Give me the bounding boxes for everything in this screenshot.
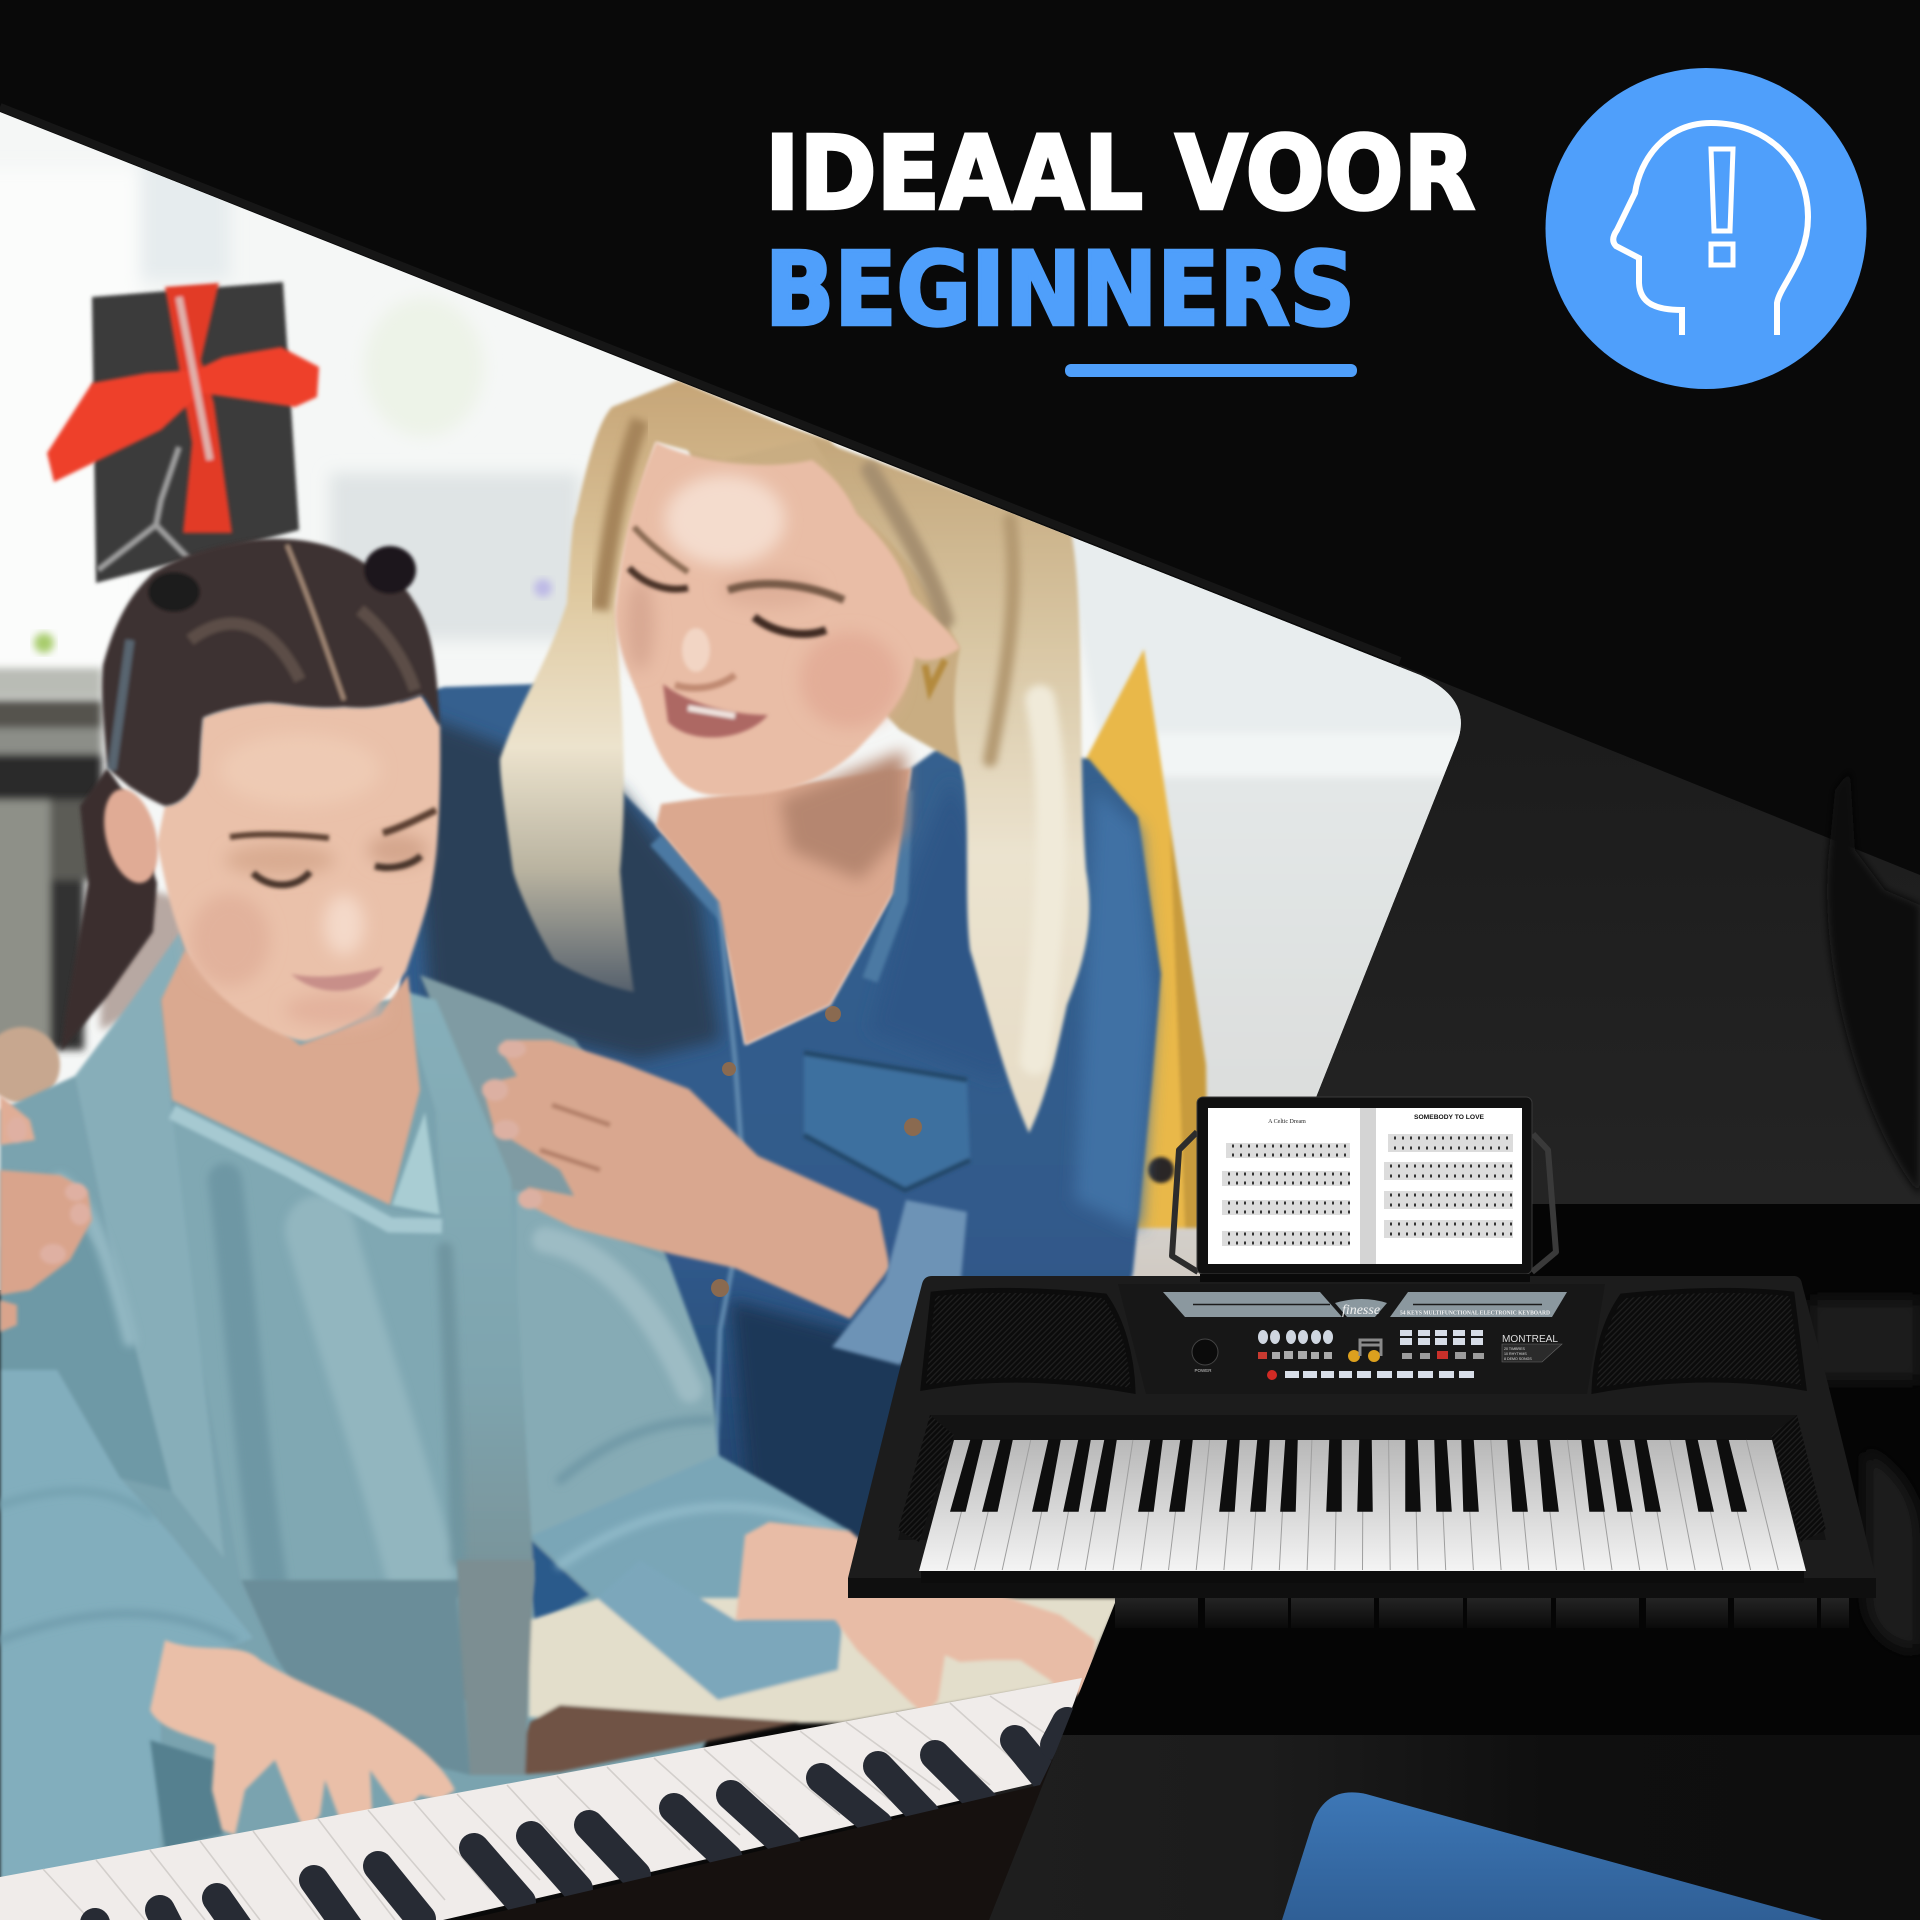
right collar band bbox=[400, 990, 534, 1700]
cardigan folds bbox=[0, 1180, 830, 1640]
music stand arms bbox=[1172, 1132, 1556, 1272]
feature box: 10 RHYTHMS bbox=[1504, 1352, 1527, 1356]
label dark lines bbox=[1193, 1304, 1542, 1306]
red percussion button bbox=[1267, 1370, 1277, 1380]
red ribbon bbox=[47, 283, 319, 570]
girl neck bbox=[161, 950, 420, 1205]
teacher left hair bbox=[500, 380, 812, 992]
title: ideaal voor: IDEAAL VOOR bbox=[765, 114, 1475, 234]
note symbol bbox=[1360, 1340, 1381, 1356]
girl face bbox=[157, 695, 440, 1041]
hair underlay bbox=[687, 420, 963, 768]
t-shirt inner piece bbox=[392, 1112, 440, 1215]
keyboard product bbox=[848, 1097, 1876, 1628]
denim pocket bbox=[804, 1053, 970, 1190]
top right buttons bbox=[1400, 1330, 1483, 1345]
song title left: A Celtic Dream bbox=[1268, 1119, 1306, 1125]
song title right: SOMEBODY TO LOVE bbox=[1414, 1114, 1485, 1121]
left speaker bbox=[923, 1290, 1133, 1391]
piano dividers bbox=[43, 1696, 1055, 1920]
girl ear bbox=[95, 783, 167, 889]
power label: POWER bbox=[1194, 1368, 1212, 1373]
denim cuff bbox=[832, 1200, 967, 1365]
exclamation mark bbox=[1711, 149, 1733, 265]
chin shadow bbox=[780, 750, 905, 880]
key slip bbox=[921, 1571, 1804, 1583]
keyboard lower strip bbox=[848, 1578, 1876, 1598]
keyboard feet bbox=[1115, 1598, 1849, 1628]
keyboard model caption: 54 KEYS MULTIFUNCTIONAL ELECTRONIC KEYBOARD bbox=[1400, 1310, 1550, 1316]
piano dark front bbox=[443, 1735, 1064, 1920]
shirt buttons bbox=[711, 1006, 922, 1297]
tablet frame bbox=[1197, 1097, 1532, 1274]
dark peg bbox=[1148, 1157, 1174, 1183]
tablet bbox=[1197, 1097, 1532, 1282]
power knob bbox=[1192, 1339, 1218, 1365]
girl hair bbox=[102, 539, 440, 806]
right key grill bbox=[1771, 1415, 1826, 1542]
denim collars bbox=[656, 790, 905, 980]
feature box: 20 TIMBRES bbox=[1504, 1347, 1526, 1351]
green ball bbox=[34, 633, 54, 653]
function buttons bbox=[1402, 1351, 1484, 1359]
girl cardigan bbox=[0, 932, 850, 1880]
keyboard control panel surround bbox=[1118, 1284, 1605, 1394]
teacher hand on shoulder bbox=[482, 1040, 890, 1319]
feature box bbox=[1502, 1344, 1562, 1362]
teacher denim shirt bbox=[400, 684, 1161, 1640]
girl face shading bbox=[190, 734, 428, 1026]
teacher right hair bbox=[812, 438, 1089, 1133]
mode buttons bbox=[1258, 1351, 1332, 1359]
white key dividers bbox=[947, 1440, 1778, 1570]
teacher facial features bbox=[629, 527, 945, 737]
girl left hand bbox=[150, 1640, 455, 1835]
photo background room bbox=[0, 90, 1480, 1300]
right sleeve denim peek bbox=[528, 1540, 590, 1625]
right hair shading bbox=[870, 470, 1051, 1060]
left collar band bbox=[75, 932, 224, 1558]
black gift box bbox=[92, 282, 299, 583]
white keys bbox=[919, 1440, 1806, 1571]
shirt placket bbox=[715, 902, 745, 1480]
white percussion row bbox=[1285, 1371, 1474, 1378]
photo: teacher and girl at piano bbox=[0, 90, 1480, 1920]
girl right hand bbox=[736, 1522, 1095, 1715]
model name: MONTREAL bbox=[1502, 1334, 1558, 1345]
finesse logo: finesse bbox=[1342, 1303, 1380, 1318]
control panel bbox=[1163, 1292, 1567, 1380]
right wall bbox=[1060, 520, 1480, 1300]
piano in photo bbox=[0, 1678, 1082, 1920]
left key grill bbox=[898, 1415, 954, 1542]
teacher other hand bbox=[0, 1095, 92, 1332]
piano black keys bbox=[95, 1722, 1067, 1920]
black keys bbox=[951, 1440, 1746, 1511]
yellow triangle instrument bbox=[1080, 649, 1208, 1228]
key bed bbox=[898, 1415, 1826, 1540]
teacher neck bbox=[656, 768, 911, 1045]
left shoulder shade bbox=[0, 1200, 172, 1491]
teacher nails bbox=[482, 1040, 542, 1209]
background: blurred piano knobs bbox=[1810, 1300, 1920, 1650]
t-shirt neckline band bbox=[172, 1112, 442, 1226]
underline accent bbox=[1065, 364, 1357, 377]
sheet music staves bbox=[1222, 1134, 1513, 1246]
background: grey blurred piano panel bbox=[1250, 665, 1920, 1204]
t-shirt bbox=[172, 1112, 465, 1656]
photo edge band bbox=[0, 107, 1400, 661]
grey label right bbox=[1390, 1292, 1567, 1317]
left sleeve bbox=[0, 1370, 253, 1880]
finesse badge bbox=[1335, 1299, 1387, 1317]
girl facial features bbox=[230, 810, 436, 991]
feature box: 8 DEMO SONGS bbox=[1504, 1357, 1532, 1361]
left hair shading bbox=[600, 420, 640, 610]
round volume buttons bbox=[1258, 1330, 1333, 1344]
background: grey lower band bbox=[980, 1735, 1920, 1920]
right sleeve bbox=[531, 1455, 850, 1700]
title: beginners: BEGINNERS bbox=[765, 230, 1355, 350]
teacher face bbox=[615, 442, 960, 796]
piano white keys bbox=[0, 1678, 1082, 1920]
left shelf bbox=[0, 668, 190, 1060]
tablet base bbox=[1200, 1274, 1530, 1282]
lower photo: beige shorts, thigh, shirt bbox=[150, 1560, 1120, 1850]
right shoulder bbox=[420, 975, 610, 1200]
blue rounded panel bbox=[1282, 1792, 1822, 1920]
orange demo buttons bbox=[1348, 1350, 1380, 1362]
fluffy toy bbox=[0, 1027, 60, 1103]
icon: head with exclamation mark bbox=[1546, 68, 1866, 389]
denim shading bbox=[410, 710, 1155, 1620]
purple flower bbox=[534, 579, 552, 597]
tablet screen bbox=[1208, 1108, 1522, 1264]
keyboard body bbox=[848, 1276, 1876, 1598]
teacher face shading bbox=[626, 475, 900, 728]
page spine bbox=[1360, 1108, 1376, 1264]
grey label left bbox=[1163, 1292, 1342, 1317]
girl braid bbox=[61, 768, 157, 1051]
background: dark lower band bbox=[900, 1204, 1920, 1735]
right arm panel bbox=[515, 1190, 718, 1536]
right speaker bbox=[1594, 1290, 1804, 1391]
